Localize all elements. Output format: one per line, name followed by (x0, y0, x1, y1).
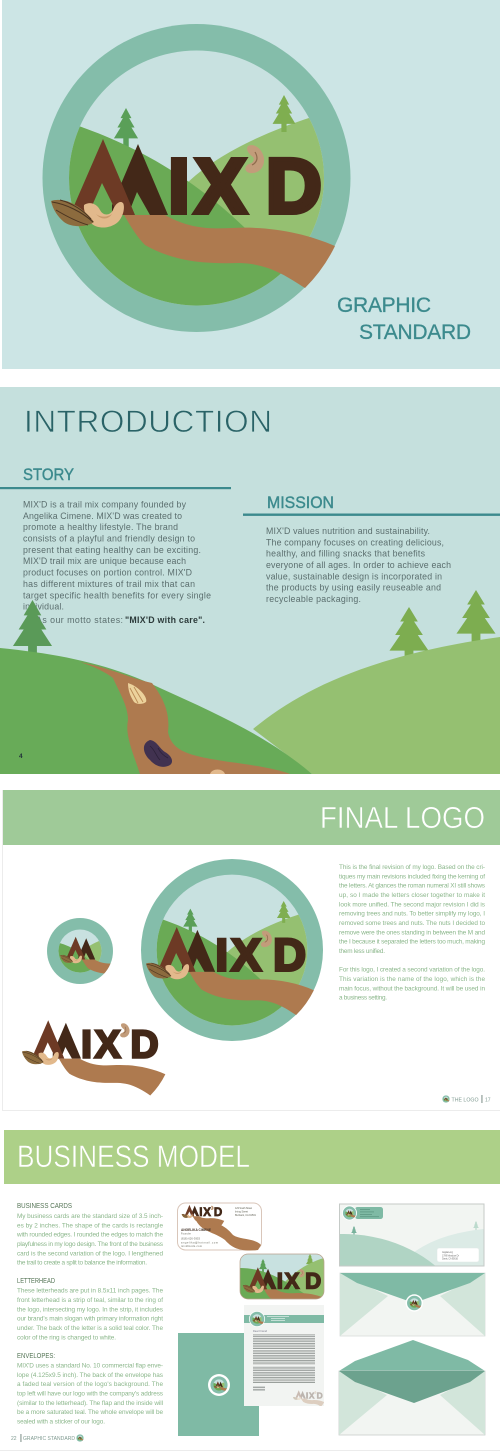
text block: final logo description: removed some trees and nuts. The nuts I decided to (339, 920, 485, 927)
text block: letterhead: These letterheads are put in 8.5x11 inch pages. The (17, 1288, 163, 1295)
text block: story: MIX'D is a trail mix company founded by (23, 500, 187, 510)
logo: large badge: D (273, 929, 306, 980)
text block: envelopes: lope (4.125x9.5 inch). The back of the envelope has (17, 1372, 163, 1379)
address label (437, 1248, 479, 1262)
text block: mission: the products by using easily reuseable and (266, 583, 441, 593)
logo: card wordmark (182, 1205, 224, 1227)
text block: final logo description: the letters. At glances the roman numeral XI still shows (339, 883, 485, 890)
logo: faded letterhead wordmark: D (317, 1390, 323, 1400)
business card: front (178, 1203, 262, 1251)
logo: wordmark without background: I (81, 1023, 92, 1066)
text block: letterhead (17, 1276, 163, 1341)
logo: wordmark without background: D (131, 1023, 159, 1066)
text block: envelopes: top left will have our logo with the company's address (17, 1390, 163, 1398)
text block: business cards: with rounded edges. I rounded the edges to match the (16, 1232, 163, 1239)
heading: story: STORY (23, 466, 74, 484)
text block: letterhead: LETTERHEAD (17, 1276, 55, 1285)
text block: final logo description: remove were the ones standing in between the M and (339, 929, 485, 936)
card contact text: Burbank, CA 91501 (235, 1213, 257, 1217)
icon: left pine tree (13, 600, 52, 652)
page number: 4 (19, 753, 23, 760)
footer: graphic standard page marker: GRAPHIC STANDARD (23, 1436, 75, 1442)
text block: story: MIX'D trail mix are unique because each (23, 556, 186, 566)
envelope: front (340, 1204, 484, 1266)
logo: card wordmark: X (203, 1207, 211, 1219)
heading: graphic standard: STANDARD (359, 321, 471, 344)
card contact text: mixdfoods.com (181, 1244, 202, 1248)
business card: back (240, 1254, 324, 1300)
logo: large badge: I (215, 929, 228, 980)
heading: graphic standard: GRAPHIC (337, 294, 431, 317)
text block: final logo description: For this logo, I created a second variation of the logo. (339, 967, 485, 974)
envelope: back open (339, 1340, 485, 1435)
icon: raisin (144, 740, 172, 767)
text block: business cards: playfulness in my logo design. The front of the business (17, 1241, 163, 1248)
logo: faded letterhead wordmark: I (306, 1390, 308, 1400)
text block: story: Angelika Cimene. MIX'D was created to (23, 511, 182, 521)
footer: the logo page marker (442, 1095, 491, 1104)
icon: cashew (210, 770, 225, 774)
header band: final logo: FINAL LOGO (320, 801, 485, 835)
text block: final logo description: a business setting. (339, 995, 387, 1002)
card contact text (181, 1206, 257, 1248)
card contact text: angelika@hotmail.com (181, 1240, 218, 1244)
header band: business model (4, 1130, 500, 1184)
text block: story: consists of a playful and friendly design to (23, 534, 195, 544)
text block: mission: value, sustainable design is incorporated in (266, 571, 442, 581)
logo: card back wordmark (242, 1267, 321, 1299)
text block: final logo description: removing trees and nuts. To better simplify my logo, I (339, 911, 485, 918)
address label: 1789 Meadow Dr (442, 1254, 459, 1258)
text block: final logo description: main focus, without the background. It will be used in (339, 985, 485, 992)
heading: graphic standard (337, 294, 471, 344)
text block: story: As our motto states: (36, 615, 123, 625)
card contact text: ANGELIKA CIMENE (181, 1228, 211, 1232)
logo: wordmark without background: X (95, 1023, 121, 1066)
panel: introduction page (0, 387, 500, 774)
logo: card back wordmark: I (277, 1269, 283, 1294)
text block: final logo description: the I because it separated the letters too much, making (339, 939, 485, 946)
text block: final logo description: them less unified. (339, 948, 385, 955)
text block: final logo description: This variation is the name of the logo, which is the (339, 976, 485, 983)
letterhead: front (244, 1305, 324, 1407)
text block: final logo description: tiques my main revisions included fixing the kerning of (339, 873, 485, 880)
text block: envelopes: a faded teal version of the logo's background. The (17, 1381, 163, 1388)
text block: envelopes: ENVELOPES: (17, 1351, 55, 1360)
logo: card wordmark: D (214, 1207, 222, 1219)
logo: wordmark without background (22, 1020, 165, 1095)
logo: faded letterhead wordmark (293, 1390, 324, 1407)
text block: mission: recycleable packaging. (266, 594, 361, 604)
text block: story: present that eating healthy can be exciting. (23, 545, 201, 555)
text block: story: product focuses on portion control. MIX'D (23, 568, 192, 578)
text block: envelopes (17, 1351, 163, 1426)
footer: the logo page marker: 17 (485, 1098, 491, 1104)
logo: card wordmark: I (199, 1207, 202, 1219)
text block: letterhead: front letterhead is a strip of teal, similar to the ring of (17, 1297, 163, 1304)
return address tag (355, 1207, 383, 1219)
panel: cover page (2, 0, 500, 369)
text block: letterhead: under. The back of the letter is a solid teal color. The (17, 1325, 163, 1332)
text block: letterhead: color of the ring is changed to white. (17, 1334, 116, 1341)
logo: card back wordmark: X (284, 1269, 299, 1294)
text block: business cards: es by 2 inches. The shape of the cards is rectangle (17, 1222, 163, 1229)
header band: final logo (3, 790, 500, 845)
illustration: hills and trail (0, 590, 500, 774)
text block: business cards: card is the second variation of the logo. I lengthened (17, 1250, 163, 1257)
envelope: back sealed (340, 1273, 485, 1336)
card contact text: Irving Street (235, 1210, 248, 1214)
text block: business cards: BUSINESS CARDS (17, 1201, 72, 1210)
text block: envelopes: sealed with a sticker of our logo. (17, 1418, 105, 1426)
footer: the logo page marker: THE LOGO (452, 1098, 478, 1104)
text block: mission: everyone of all ages. In order to achieve each (266, 560, 451, 570)
text block: mission: healthy, and filling snacks that benefits (266, 549, 426, 559)
text block: business cards (16, 1201, 163, 1267)
text block: letterhead: our brand's main slogan with primary information right (17, 1316, 163, 1323)
text block: business cards: the trail to create a split to balance the information. (17, 1260, 147, 1267)
logo: large badge (141, 859, 323, 1041)
logo: faded letterhead wordmark: X (309, 1390, 315, 1400)
text block: mission (266, 526, 451, 604)
text block: letterhead: the logo, intersecting my logo. In the strip, it includes (17, 1306, 163, 1313)
card contact text: Founder (181, 1232, 191, 1236)
letterhead: front: Dear Friend (253, 1329, 268, 1333)
footer: graphic standard page marker: 22 (11, 1436, 17, 1442)
logo: card back wordmark: D (305, 1269, 321, 1294)
text block: envelopes: (similar to the letterhead). The flap and the inside will (17, 1400, 163, 1407)
icon: sunflower seed (128, 683, 146, 704)
header band: business model: BUSINESS MODEL (17, 1138, 250, 1174)
text block: story (23, 500, 211, 625)
text block: mission: The company focuses on creating delicious, (266, 537, 444, 547)
logo: small badge (47, 918, 145, 984)
text block: final logo description: look more unified. The second major revision I did is (339, 901, 485, 908)
text block: envelopes: be a more saturated teal. The whole envelope will be (17, 1409, 163, 1416)
title: introduction: INTRODUCTION (24, 403, 272, 439)
panel: final logo page (2, 790, 500, 1110)
text block: story: promote a healthy lifestyle. The brand (23, 522, 178, 532)
heading: mission: MISSION (267, 494, 334, 512)
text block: story: target specific health benefits for every single (23, 590, 211, 600)
footer: graphic standard page marker (11, 1434, 87, 1442)
text block: story: has different mixtures of trail mix that can (23, 579, 195, 589)
logo: circular MIX'D badge (42, 24, 350, 332)
text block: final logo description (339, 864, 485, 1002)
address label: Angela Long (442, 1251, 454, 1254)
logo: large badge: X (231, 929, 261, 980)
card contact text: 123 South Street (235, 1206, 252, 1210)
text block: envelopes: MIX'D uses a standard No. 10 commercial flap enve- (17, 1362, 163, 1370)
text block: story: individual. (23, 602, 64, 612)
icon: pine trees (389, 590, 496, 663)
logo: circular MIX'D badge: D (266, 144, 322, 230)
card contact text: (818) 626-3953 (181, 1236, 201, 1240)
text block: business cards: My business cards are the standard size of 3.5 inch- (17, 1213, 163, 1220)
address label: Davis, CA 95616 (442, 1258, 459, 1260)
letterhead: back (178, 1333, 259, 1436)
panel: business model page (0, 1130, 500, 1451)
text block: final logo description: up, so I made the letters closer together to make it (339, 892, 485, 899)
text block: final logo description: This is the final revision of my logo. Based on the cri- (339, 864, 485, 871)
text block: story: "MIX'D with care". (125, 615, 205, 625)
text block: mission: MIX'D values nutrition and sustainability. (266, 526, 430, 536)
logo: circular MIX'D badge: X (195, 144, 246, 230)
logo: circular MIX'D badge: I (168, 144, 190, 230)
